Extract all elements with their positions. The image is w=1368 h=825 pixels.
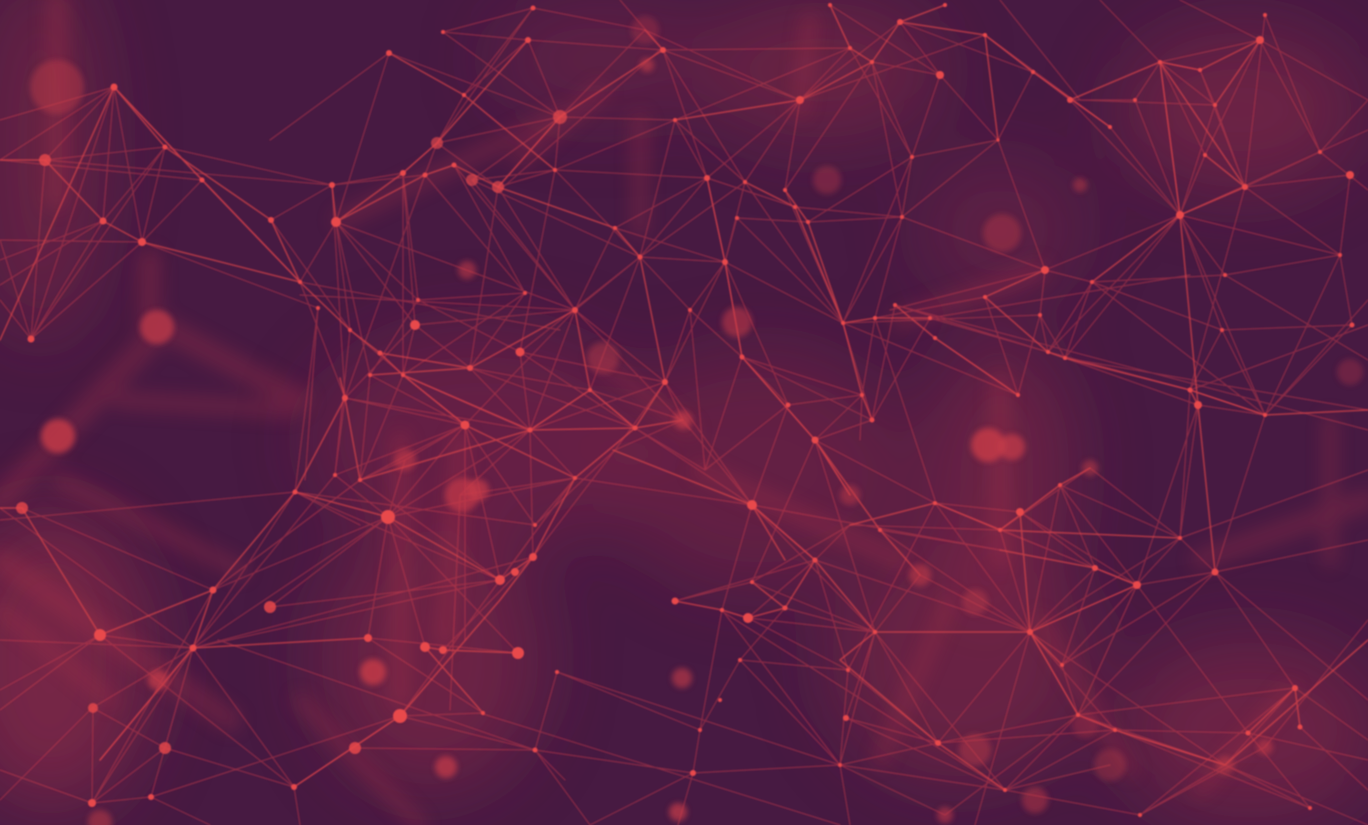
extra density — [0, 87, 350, 339]
